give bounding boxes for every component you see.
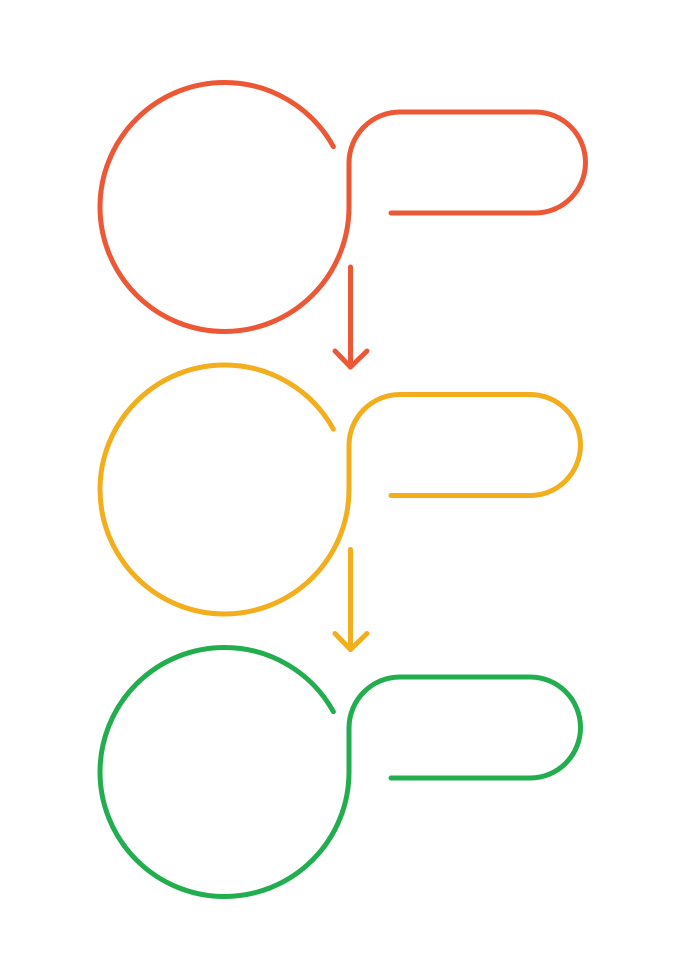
circle outline: step 1: [100, 82, 349, 332]
arrow: step 1 to step 2: [335, 267, 367, 367]
step 3: green circle and label frame: [100, 648, 580, 896]
label frame: step 1: [349, 112, 586, 213]
step 1: red circle and label frame: [100, 82, 586, 332]
circle outline: step 2: [100, 365, 349, 614]
arrow: step 2 to step 3: [335, 550, 367, 650]
circle outline: step 3: [100, 648, 349, 896]
label frame: step 3: [349, 677, 580, 778]
label frame: step 2: [349, 394, 580, 496]
step 2: amber circle and label frame: [100, 365, 580, 614]
